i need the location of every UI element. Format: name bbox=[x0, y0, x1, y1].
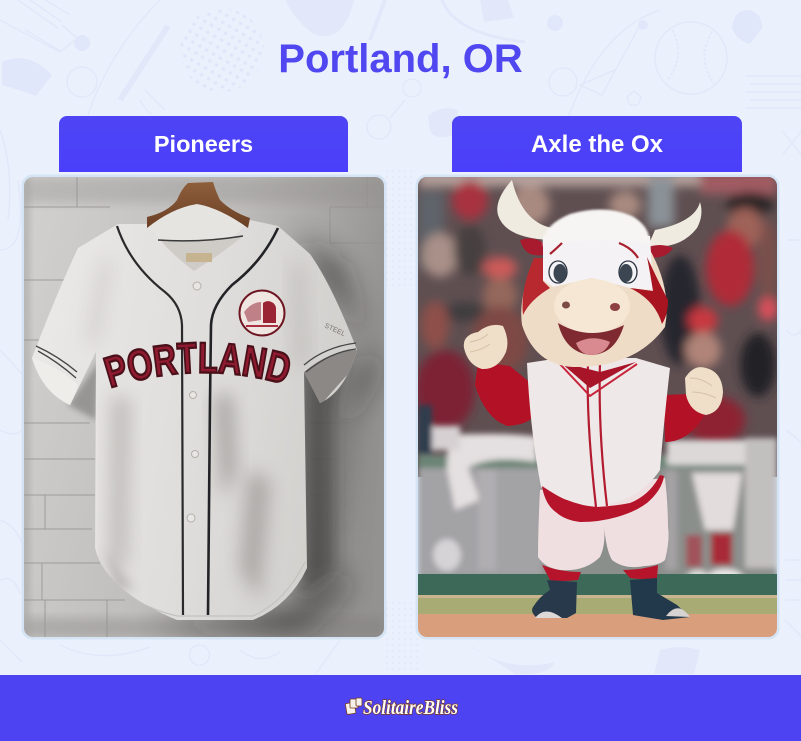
footer band bbox=[0, 675, 801, 741]
jersey cast shadow bbox=[150, 235, 375, 630]
hanger bbox=[147, 182, 250, 228]
panel: Axle the Ox mascot bbox=[415, 116, 778, 638]
photo: baseball jersey on a hanger bbox=[24, 177, 384, 637]
blurred crowd bbox=[415, 172, 778, 444]
heading banner: Axle the Ox bbox=[452, 116, 742, 172]
heading banner: Pioneers bbox=[59, 116, 348, 172]
panel: Pioneers jersey bbox=[22, 116, 386, 640]
red face markings bbox=[522, 258, 550, 315]
title: Portland, OR bbox=[278, 37, 523, 81]
fur tuft bbox=[543, 209, 650, 246]
heading banner: Axle the Ox: Axle the Ox bbox=[531, 131, 664, 158]
muzzle and mouth bbox=[554, 279, 630, 333]
photo frame bbox=[22, 176, 386, 638]
PORTLAND lettering bbox=[110, 372, 291, 388]
fists bbox=[464, 325, 723, 415]
photo: baseball jersey on a hanger: PORTLAND bbox=[102, 342, 290, 388]
jersey body bbox=[30, 204, 357, 620]
photo: mascot on a baseball field bbox=[415, 172, 778, 637]
chest patch bbox=[240, 290, 284, 336]
logo: Solitaire Bliss: SolitaireBliss bbox=[363, 697, 458, 719]
blurred bleachers and players bbox=[418, 405, 777, 587]
mascot bbox=[464, 180, 723, 620]
ears bbox=[520, 238, 546, 255]
icon: playing cards bbox=[345, 698, 362, 715]
pants bbox=[538, 478, 669, 570]
eyes bbox=[549, 243, 638, 283]
inside of neckline bbox=[150, 204, 250, 240]
photo: baseball jersey on a hanger: STEEL bbox=[323, 322, 346, 338]
jersey torso bbox=[527, 358, 670, 507]
heading banner: Pioneers: Pioneers bbox=[154, 131, 253, 157]
photo frame bbox=[416, 176, 778, 638]
arms bbox=[475, 362, 533, 426]
socks and shoes bbox=[542, 565, 581, 581]
white upper face bbox=[543, 236, 653, 290]
horns bbox=[497, 180, 552, 240]
fabric folds bbox=[88, 260, 308, 600]
belt bbox=[542, 475, 664, 522]
head bbox=[521, 250, 667, 367]
